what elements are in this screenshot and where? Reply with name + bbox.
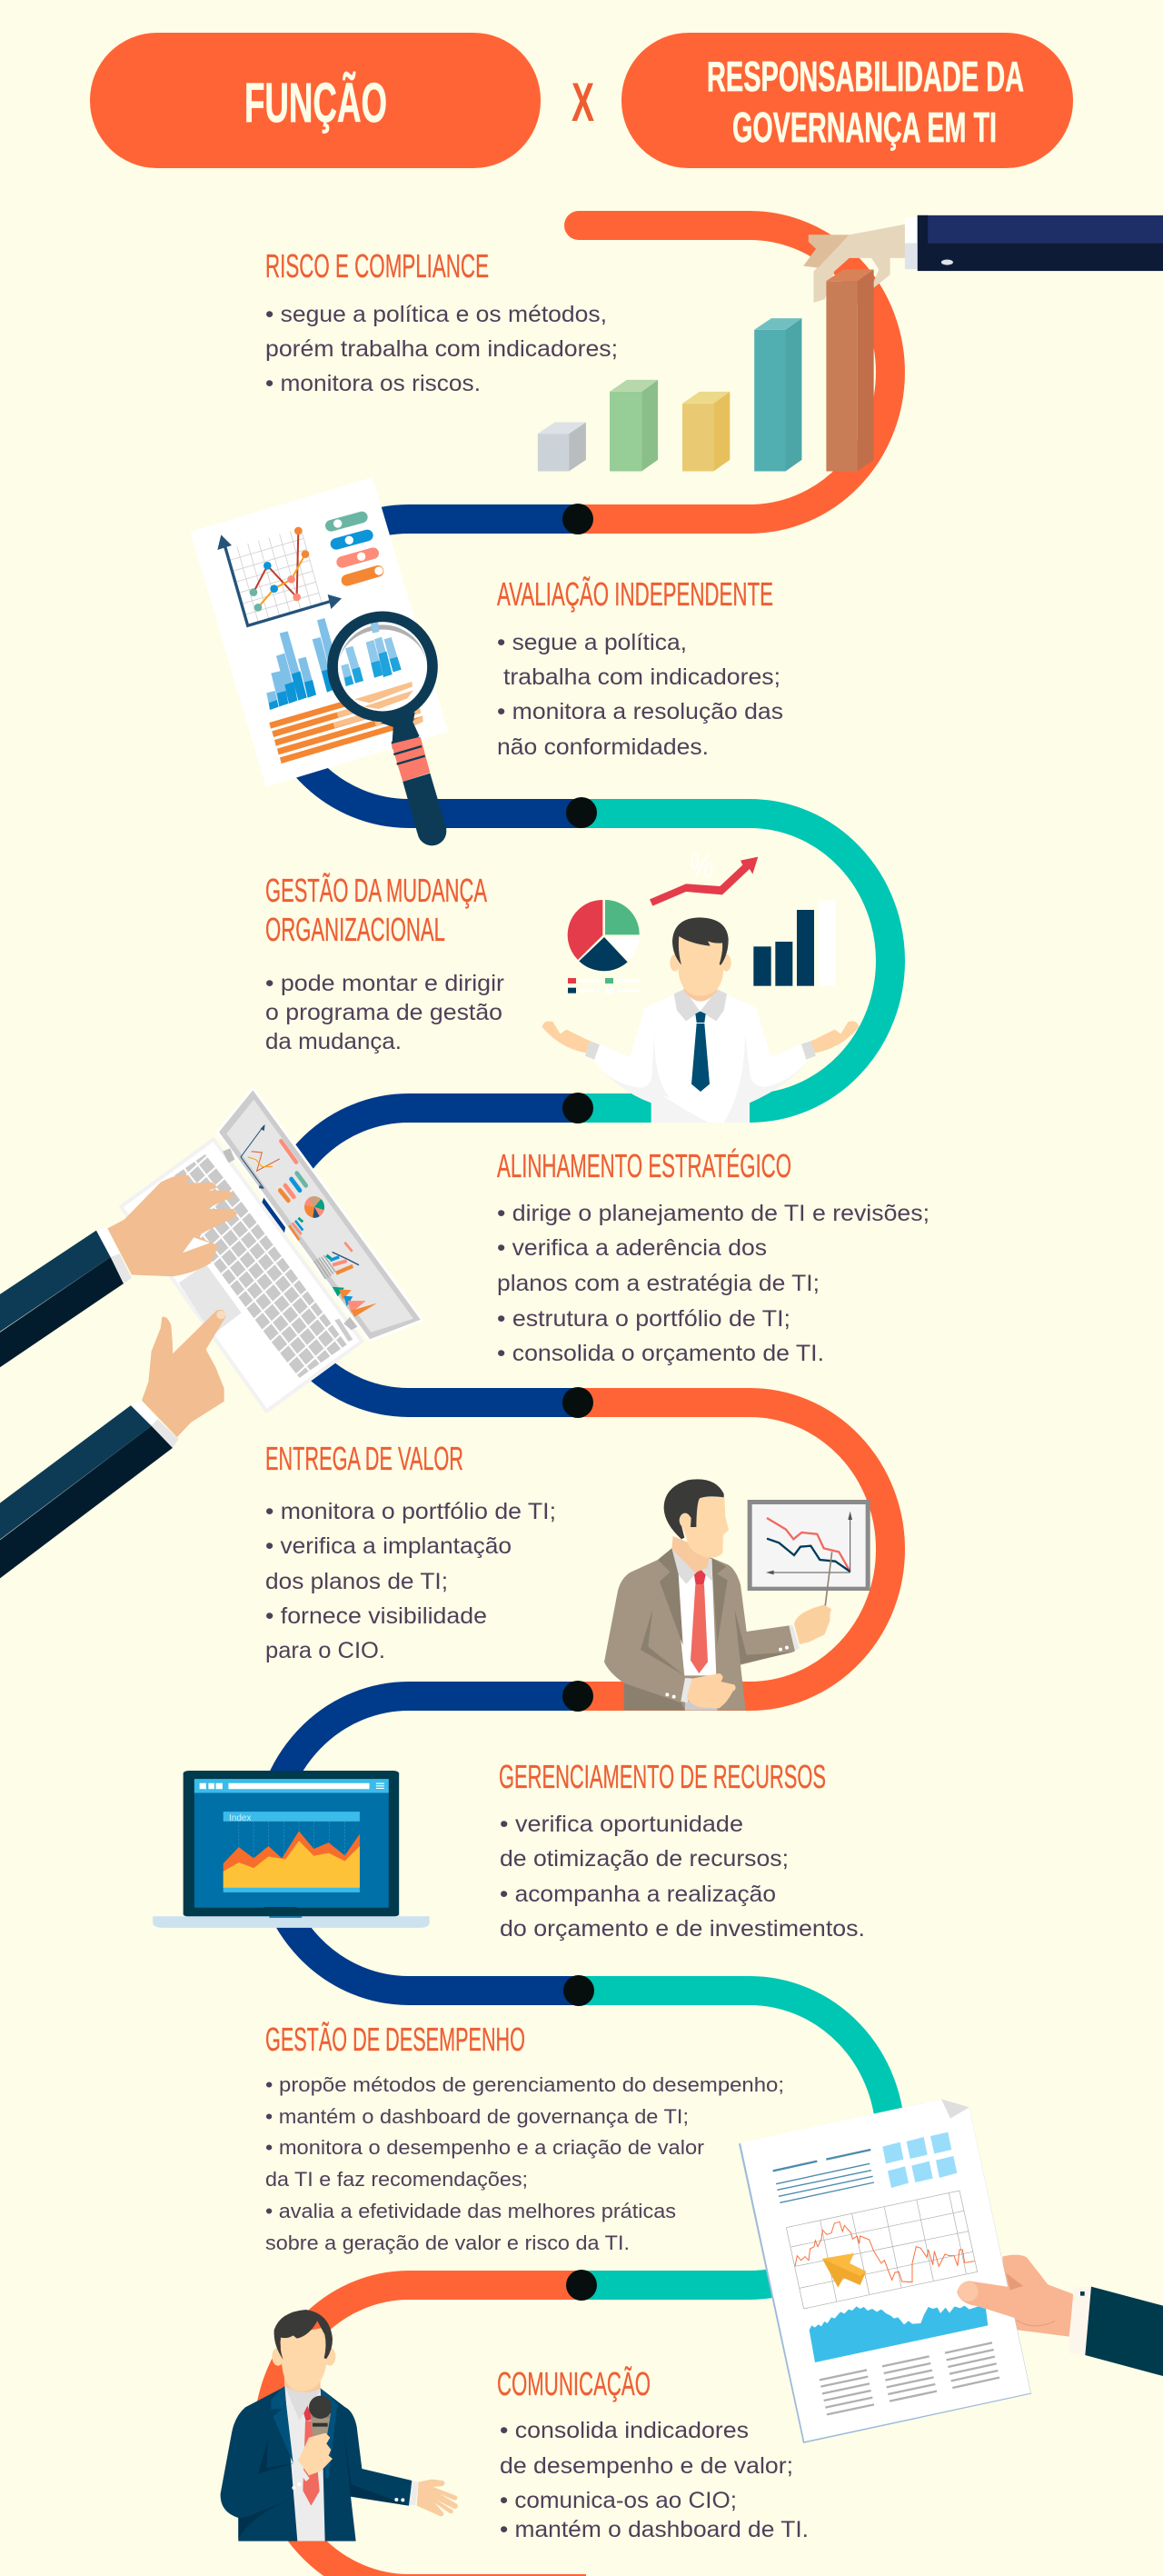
lower arm and hand bbox=[0, 1310, 225, 1578]
heading: COMUNICAÇÃO bbox=[497, 2365, 651, 2402]
title header bbox=[90, 33, 1073, 168]
icon: hands using laptop bbox=[0, 1088, 422, 1578]
pill: responsabilidade bbox=[621, 33, 1073, 168]
body text: da mudança. bbox=[265, 1029, 402, 1054]
cursor arrow bbox=[822, 2253, 866, 2288]
presenter figure bbox=[604, 1479, 831, 1711]
line chart bbox=[217, 527, 342, 625]
pill: função bbox=[90, 33, 541, 168]
businessman figure bbox=[542, 917, 859, 1123]
body text: • propõe métodos de gerenciamento do desempenho; bbox=[265, 2073, 784, 2096]
body text: de otimização de recursos; bbox=[500, 1846, 789, 1872]
icon: 3d bar chart with hand bbox=[538, 215, 1163, 471]
heading bbox=[265, 872, 487, 948]
heading: ORGANIZACIONAL bbox=[265, 911, 445, 948]
heading: ALINHAMENTO ESTRATÉGICO bbox=[497, 1147, 791, 1184]
upper arm and hand bbox=[0, 1174, 237, 1367]
heading: RISCO E COMPLIANCE bbox=[265, 247, 489, 285]
bar: grey bbox=[538, 423, 586, 471]
toggles bbox=[331, 517, 383, 580]
section: avaliação independente bbox=[497, 575, 783, 760]
body text: • monitora os riscos. bbox=[265, 371, 481, 396]
bar: teal bbox=[754, 318, 801, 471]
laptop screen charts bbox=[241, 1124, 377, 1317]
body text: • comunica-os ao CIO; bbox=[500, 2488, 737, 2513]
body text: porém trabalha com indicadores; bbox=[265, 336, 618, 362]
section: alinhamento estratégico bbox=[497, 1147, 929, 1366]
area chart bbox=[810, 2306, 988, 2362]
body text: • avalia a efetividade das melhores práticas bbox=[265, 2200, 676, 2222]
icon: presenter with whiteboard bbox=[604, 1479, 870, 1711]
report sheet bbox=[739, 2099, 1031, 2443]
body text: • pode montar e dirigir bbox=[265, 971, 504, 996]
icon: laptop with area chart bbox=[153, 1771, 430, 1928]
pill: responsabilidade: GOVERNANÇA EM TI bbox=[732, 104, 997, 151]
laptop drawing bbox=[153, 1771, 430, 1928]
section: entrega de valor bbox=[265, 1440, 556, 1663]
body text: • verifica oportunidade bbox=[500, 1812, 743, 1837]
heading: GESTÃO DA MUDANÇA bbox=[265, 872, 487, 909]
icon: speaker with microphone bbox=[221, 2310, 458, 2541]
growth arrow bbox=[650, 857, 758, 906]
winding path bbox=[268, 225, 890, 2576]
body text bbox=[497, 1201, 929, 1366]
heading: AVALIAÇÃO INDEPENDENTE bbox=[497, 575, 773, 613]
body text: • monitora o desempenho e a criação de valor bbox=[265, 2136, 705, 2159]
body text bbox=[265, 2073, 784, 2254]
body text: • monitora a resolução das bbox=[497, 699, 783, 724]
icon: businessman with charts bbox=[542, 846, 859, 1123]
body text: • estrutura o portfólio de TI; bbox=[497, 1306, 790, 1332]
hands and cuffs bbox=[292, 2433, 458, 2516]
versus mark: X bbox=[572, 72, 594, 133]
body text: dos planos de TI; bbox=[265, 1569, 448, 1594]
whiteboard chart bbox=[748, 1500, 870, 1591]
body text bbox=[265, 971, 504, 1054]
section: gestão de desempenho bbox=[265, 2021, 784, 2254]
hand bbox=[803, 225, 906, 303]
body text bbox=[265, 1499, 556, 1663]
body text bbox=[265, 302, 618, 396]
sleeve bbox=[905, 215, 1163, 271]
column chart bbox=[753, 901, 836, 986]
head bbox=[272, 2310, 335, 2392]
orange stripes bbox=[269, 681, 423, 764]
icon: report with magnifying glass bbox=[190, 477, 448, 845]
tie bbox=[303, 2406, 320, 2506]
body text: sobre a geração de valor e risco da TI. bbox=[265, 2232, 630, 2254]
heading: ENTREGA DE VALOR bbox=[265, 1440, 463, 1477]
section: risco e compliance bbox=[265, 247, 618, 396]
body text: para o CIO. bbox=[265, 1638, 385, 1663]
chart label: Index bbox=[229, 1813, 251, 1823]
body text: da TI e faz recomendações; bbox=[265, 2168, 528, 2191]
heading: GERENCIAMENTO DE RECURSOS bbox=[499, 1758, 826, 1795]
bar: brown bbox=[826, 270, 874, 471]
body text: • consolida indicadores bbox=[500, 2418, 749, 2443]
microphone bbox=[309, 2396, 332, 2445]
body text: • dirige o planejamento de TI e revisões; bbox=[497, 1201, 929, 1226]
body text bbox=[500, 1812, 865, 1942]
body text: • segue a política e os métodos, bbox=[265, 302, 607, 327]
body text: • fornece visibilidade bbox=[265, 1603, 487, 1629]
report sheet bbox=[190, 477, 448, 787]
magnifying glass bbox=[333, 616, 446, 845]
hand behind sheet bbox=[1002, 2255, 1074, 2337]
pointer bbox=[824, 1552, 832, 1615]
body text: • mantém o dashboard de governança de TI; bbox=[265, 2105, 689, 2128]
section: comunicação bbox=[497, 2365, 809, 2542]
pill: função: FUNÇÃO bbox=[244, 72, 387, 134]
body text: planos com a estratégia de TI; bbox=[497, 1271, 820, 1296]
body text: o programa de gestão bbox=[265, 1000, 502, 1025]
laptop bbox=[121, 1088, 422, 1411]
body text: • mantém o dashboard de TI. bbox=[500, 2517, 809, 2542]
body text: • monitora o portfólio de TI; bbox=[265, 1499, 556, 1524]
thumb and sleeve bbox=[957, 2273, 1163, 2376]
percent sign: % bbox=[690, 846, 713, 885]
bar charts bbox=[266, 618, 339, 710]
body text: do orçamento e de investimentos. bbox=[500, 1916, 865, 1942]
body text: • verifica a implantação bbox=[265, 1533, 512, 1559]
body text: • acompanha a realização bbox=[500, 1882, 776, 1907]
body text: trabalha com indicadores; bbox=[503, 664, 780, 690]
body text bbox=[500, 2418, 809, 2542]
body text: • consolida o orçamento de TI. bbox=[497, 1341, 824, 1366]
bar: green bbox=[610, 380, 658, 471]
section: gestão da mudança organizacional bbox=[265, 872, 504, 1054]
grey text columns bbox=[820, 2342, 999, 2414]
path junction dots bbox=[562, 504, 597, 2301]
body text: • segue a política, bbox=[497, 630, 687, 655]
body text: • verifica a aderência dos bbox=[497, 1235, 767, 1261]
stock line chart bbox=[786, 2191, 978, 2309]
body text: não conformidades. bbox=[497, 734, 709, 760]
jacket bbox=[221, 2386, 412, 2541]
body text bbox=[497, 630, 783, 760]
section: gerenciamento de recursos bbox=[499, 1758, 865, 1942]
bar: yellow bbox=[682, 392, 730, 471]
body text: de desempenho e de valor; bbox=[500, 2453, 793, 2479]
icon: hand holding report bbox=[739, 2099, 1163, 2443]
heading: GESTÃO DE DESEMPENHO bbox=[265, 2021, 525, 2058]
text lines and tiles bbox=[773, 2132, 957, 2202]
pie chart bbox=[568, 900, 640, 993]
